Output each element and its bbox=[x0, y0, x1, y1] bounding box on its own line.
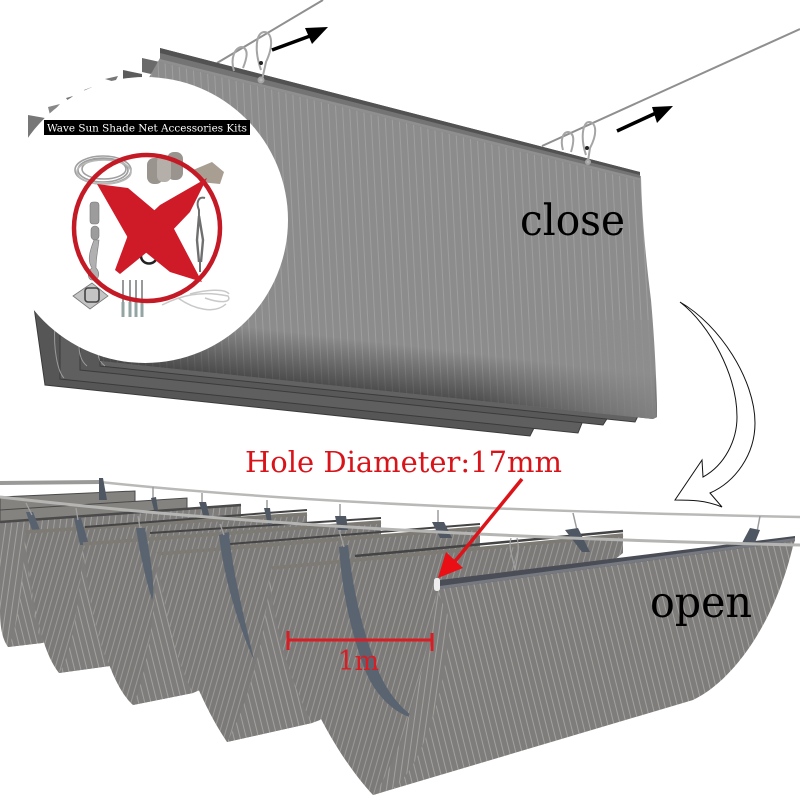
fabric fold curves bbox=[55, 325, 105, 378]
label: close: close bbox=[520, 196, 625, 246]
icon: pad eye plate bbox=[73, 283, 108, 309]
panel: closed shade bbox=[28, 0, 800, 436]
banner: kit title bbox=[44, 120, 250, 135]
icon: red prohibition circle bbox=[74, 155, 220, 301]
banner: kit title: Wave Sun Shade Net Accessories Kits bbox=[47, 124, 247, 134]
top rail bbox=[160, 48, 640, 181]
label: open: open bbox=[650, 578, 752, 628]
callout: accessories kit not included bbox=[2, 77, 288, 363]
wave fold 3 bbox=[59, 518, 381, 705]
icon: rope bbox=[162, 290, 229, 310]
fold 4 strap bbox=[219, 532, 254, 660]
arrow: hole pointer bbox=[438, 479, 522, 578]
icon: red cross bbox=[97, 178, 207, 282]
panel: open shade bbox=[0, 445, 800, 795]
far rails bbox=[0, 491, 187, 535]
main closed fabric sheet bbox=[80, 58, 657, 419]
front wire with hooks bbox=[0, 497, 800, 570]
cable: right top wire bbox=[542, 29, 800, 146]
icon: eye ring bbox=[141, 248, 157, 264]
fold 3 strap bbox=[136, 528, 153, 600]
wave fold 4 bbox=[133, 524, 480, 742]
arrow: right pull direction bbox=[617, 106, 673, 131]
carabiner hooks right bbox=[562, 122, 595, 164]
icon: swivel snap hook bbox=[88, 202, 99, 280]
wave fold 5 bbox=[227, 531, 623, 795]
icon: wire clamps bbox=[147, 152, 224, 184]
wave fold 2 bbox=[8, 510, 307, 673]
cable: left top wire bbox=[217, 0, 323, 63]
white circle background bbox=[2, 77, 288, 363]
front wave panel bbox=[373, 540, 795, 795]
arrow: curved transition from close to open bbox=[675, 302, 755, 507]
dimension line: 1m bbox=[288, 631, 432, 651]
icon: turnbuckle bbox=[197, 198, 205, 272]
icon: expansion bolts bbox=[123, 280, 142, 317]
carabiner hooks left bbox=[233, 32, 271, 82]
wave fold 1 bbox=[0, 505, 241, 647]
folded rear layers of fabric bbox=[33, 300, 640, 436]
icon: wire coil bbox=[75, 156, 131, 184]
label: 1m: 1m bbox=[338, 646, 379, 677]
label: hole diameter: Hole Diameter:17mm bbox=[245, 445, 562, 479]
front rail bbox=[440, 536, 795, 589]
fold 2 strap bbox=[74, 518, 89, 545]
hole knob bbox=[434, 578, 440, 591]
fold 1 strap bbox=[26, 512, 40, 530]
stacked rear rails bbox=[28, 58, 160, 138]
arrow: left pull direction bbox=[272, 27, 328, 50]
fold 5 strap bbox=[339, 545, 417, 719]
rear wire with hooks bbox=[0, 478, 800, 552]
